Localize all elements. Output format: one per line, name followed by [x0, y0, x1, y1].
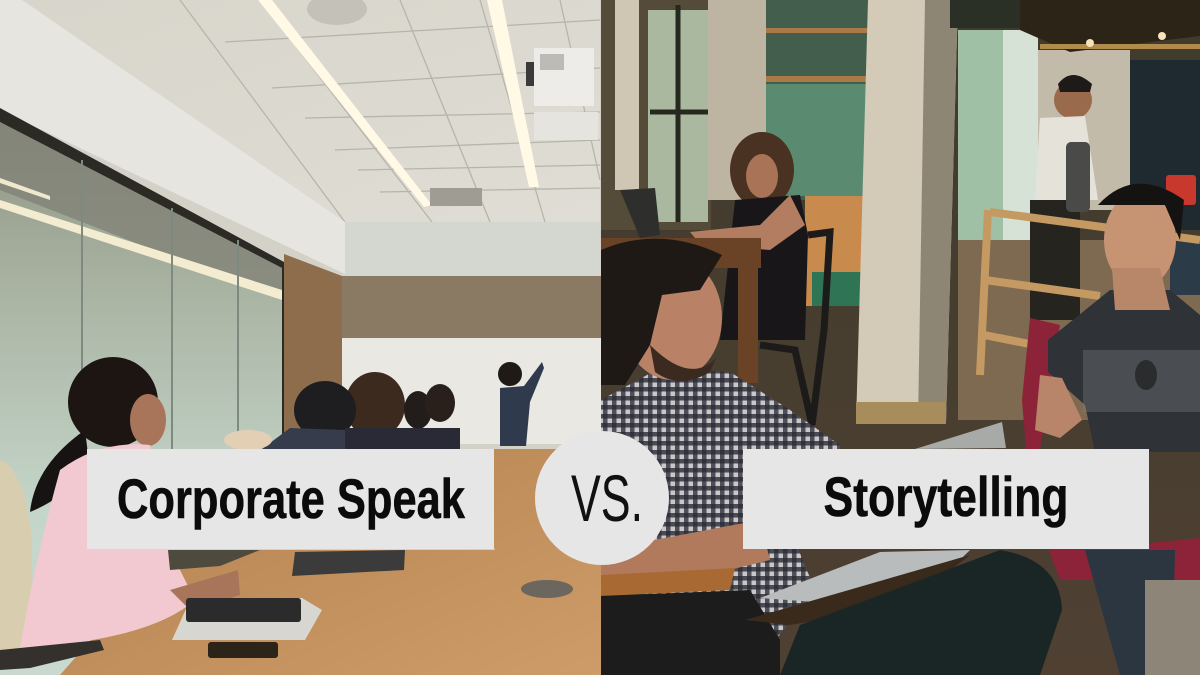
left wall band [0, 0, 345, 274]
laptops and tablet on table [0, 550, 573, 670]
ceiling light strips [258, 0, 539, 207]
far room [950, 0, 1200, 420]
bearded man in check shirt [601, 239, 840, 675]
label: Storytelling: Storytelling [824, 465, 1068, 528]
ceiling [20, 0, 600, 222]
conference table [60, 449, 601, 675]
VS. badge [535, 431, 669, 565]
whiteboard [342, 338, 601, 444]
panel: cafe photo [601, 0, 1200, 675]
label: Corporate Speak: Corporate Speak [117, 467, 466, 530]
VS. badge: VS. [571, 461, 643, 535]
ceiling vent [430, 188, 482, 206]
presenter [498, 362, 544, 446]
label: Storytelling [743, 449, 1149, 549]
smiling man in grey tee [1022, 184, 1200, 675]
ceiling speaker [307, 0, 367, 25]
panel: boardroom photo [0, 0, 601, 675]
man's laptop and jeans [745, 422, 1062, 675]
barista [1030, 75, 1098, 320]
glass wall [0, 108, 284, 675]
seated colleagues [224, 372, 460, 450]
wood shelf table [980, 210, 1200, 375]
pillar [856, 0, 958, 424]
window and back wall [601, 0, 872, 306]
background woman at laptop [601, 132, 830, 425]
projector [526, 48, 598, 140]
label: Corporate Speak [87, 449, 494, 549]
wood wall panel [284, 254, 342, 450]
brown back wall [342, 276, 601, 338]
woman in pink [0, 357, 240, 660]
